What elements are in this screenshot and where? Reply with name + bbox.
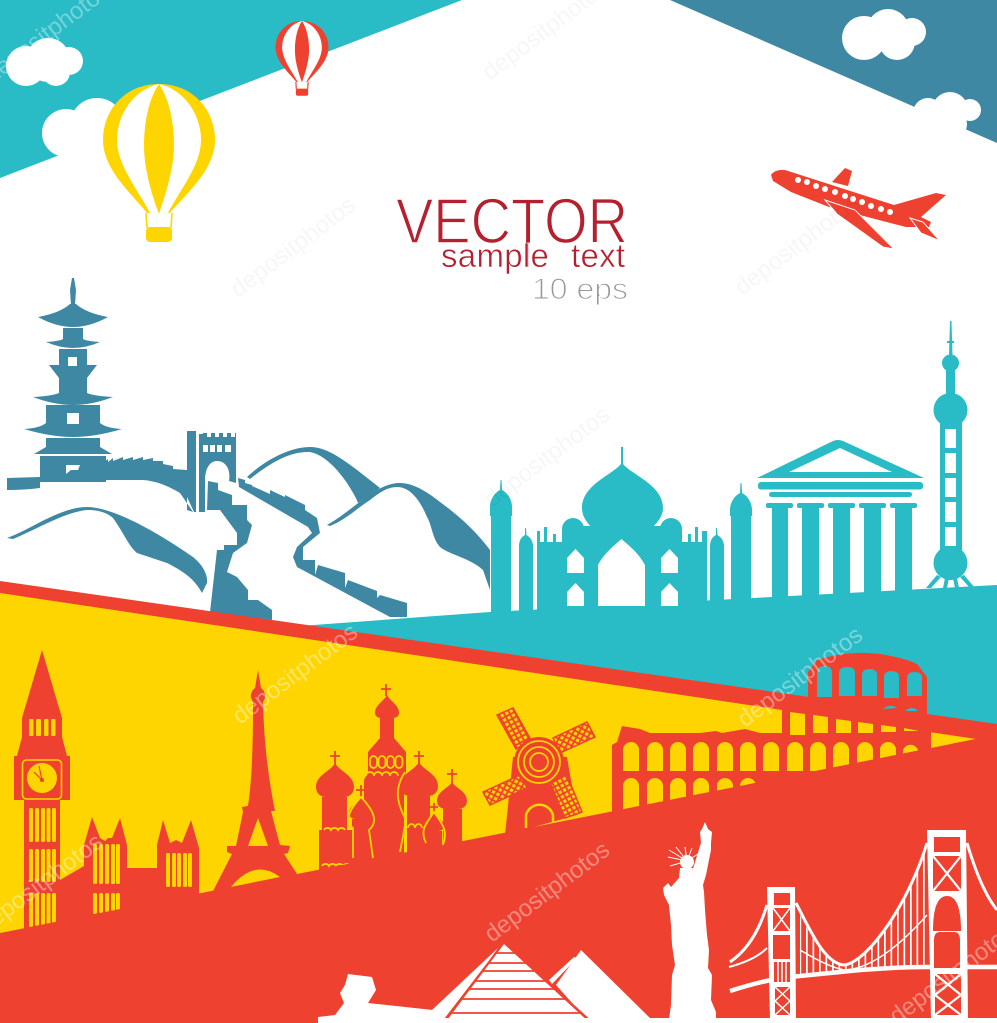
great pyramid: [441, 941, 594, 1023]
landmark: Oriental Pearl tower: [926, 321, 975, 588]
heading: VECTOR: VECTOR: [396, 185, 628, 257]
landmark: Great Wall: [105, 431, 407, 620]
colosseum upper ring: [808, 653, 927, 720]
yellow ornaments: [322, 756, 445, 866]
minaret inner left: [519, 528, 533, 612]
cables and deck: [729, 843, 997, 991]
minaret inner right: [710, 528, 724, 606]
title block: [396, 185, 628, 306]
landmark: Houses of Parliament: [60, 817, 199, 935]
icon: red hot air balloon: [276, 21, 328, 96]
red foreground ground: [0, 736, 997, 1023]
white bottom strip: [318, 1018, 997, 1023]
landmark: Statue of Liberty: [663, 822, 716, 1019]
left face sliver: [432, 948, 498, 1023]
landmark: windmill: [483, 708, 595, 835]
cloud: right edge: [913, 92, 981, 139]
colosseum body: [612, 700, 931, 825]
icon: airplane: [771, 168, 946, 249]
large tower: [927, 830, 968, 1019]
crosses: [330, 684, 457, 815]
small tower: [767, 887, 796, 1019]
cloud: top right: [842, 9, 926, 60]
sails: [483, 708, 595, 818]
landmark: Giza pyramids: [432, 941, 655, 1023]
colosseum upper windows: [790, 712, 919, 735]
landmark: Big Ben: [14, 650, 70, 935]
small pyramid: [549, 950, 655, 1023]
watermark text: depositphotos: [732, 621, 868, 733]
watermark text: depositphotos: [729, 189, 865, 301]
watermark text: depositphotos: [479, 401, 615, 513]
mill body: [505, 757, 577, 835]
ground: teal strip: [300, 585, 997, 730]
wheel: [514, 737, 564, 787]
mountains: [7, 447, 490, 593]
subheading: sample text: sample: [441, 237, 549, 274]
T stem extension: [526, 240, 528, 267]
icon: yellow hot air balloon: [103, 84, 215, 242]
onion domes: [375, 695, 399, 718]
landmark: Sphinx: [318, 974, 446, 1023]
towers: [364, 718, 406, 870]
landmark: Saint Basil's Cathedral: [316, 684, 467, 870]
caption: 10 eps: 10 eps: [532, 273, 628, 306]
landmark: Taj Mahal: [490, 447, 752, 612]
suspenders: [800, 850, 925, 977]
watermark text: depositphotos: [479, 836, 615, 948]
colosseum arches: [623, 742, 918, 820]
landmark: Chinese pagoda: [7, 278, 122, 490]
diagonal red band: [0, 581, 997, 750]
minaret far left: [490, 480, 512, 612]
landmark: Greek temple: [757, 440, 924, 597]
yellow panel: [0, 593, 976, 933]
minaret far right: [730, 483, 752, 604]
main hall: [537, 447, 707, 612]
sky wedge: left teal: [0, 0, 462, 178]
sky wedge: right blue: [670, 0, 997, 143]
subheading: sample text: text: [571, 237, 625, 274]
cloud: top left small: [6, 38, 83, 86]
watermark text: depositphotos: [225, 191, 361, 303]
landmark: suspension bridge: [729, 830, 997, 1019]
landmark: Eiffel Tower: [210, 670, 297, 897]
cloud: behind yellow balloon: [42, 98, 145, 175]
watermark text: depositphotos: [227, 618, 363, 730]
landmark: Colosseum: [612, 653, 931, 825]
door arch: [526, 805, 553, 828]
